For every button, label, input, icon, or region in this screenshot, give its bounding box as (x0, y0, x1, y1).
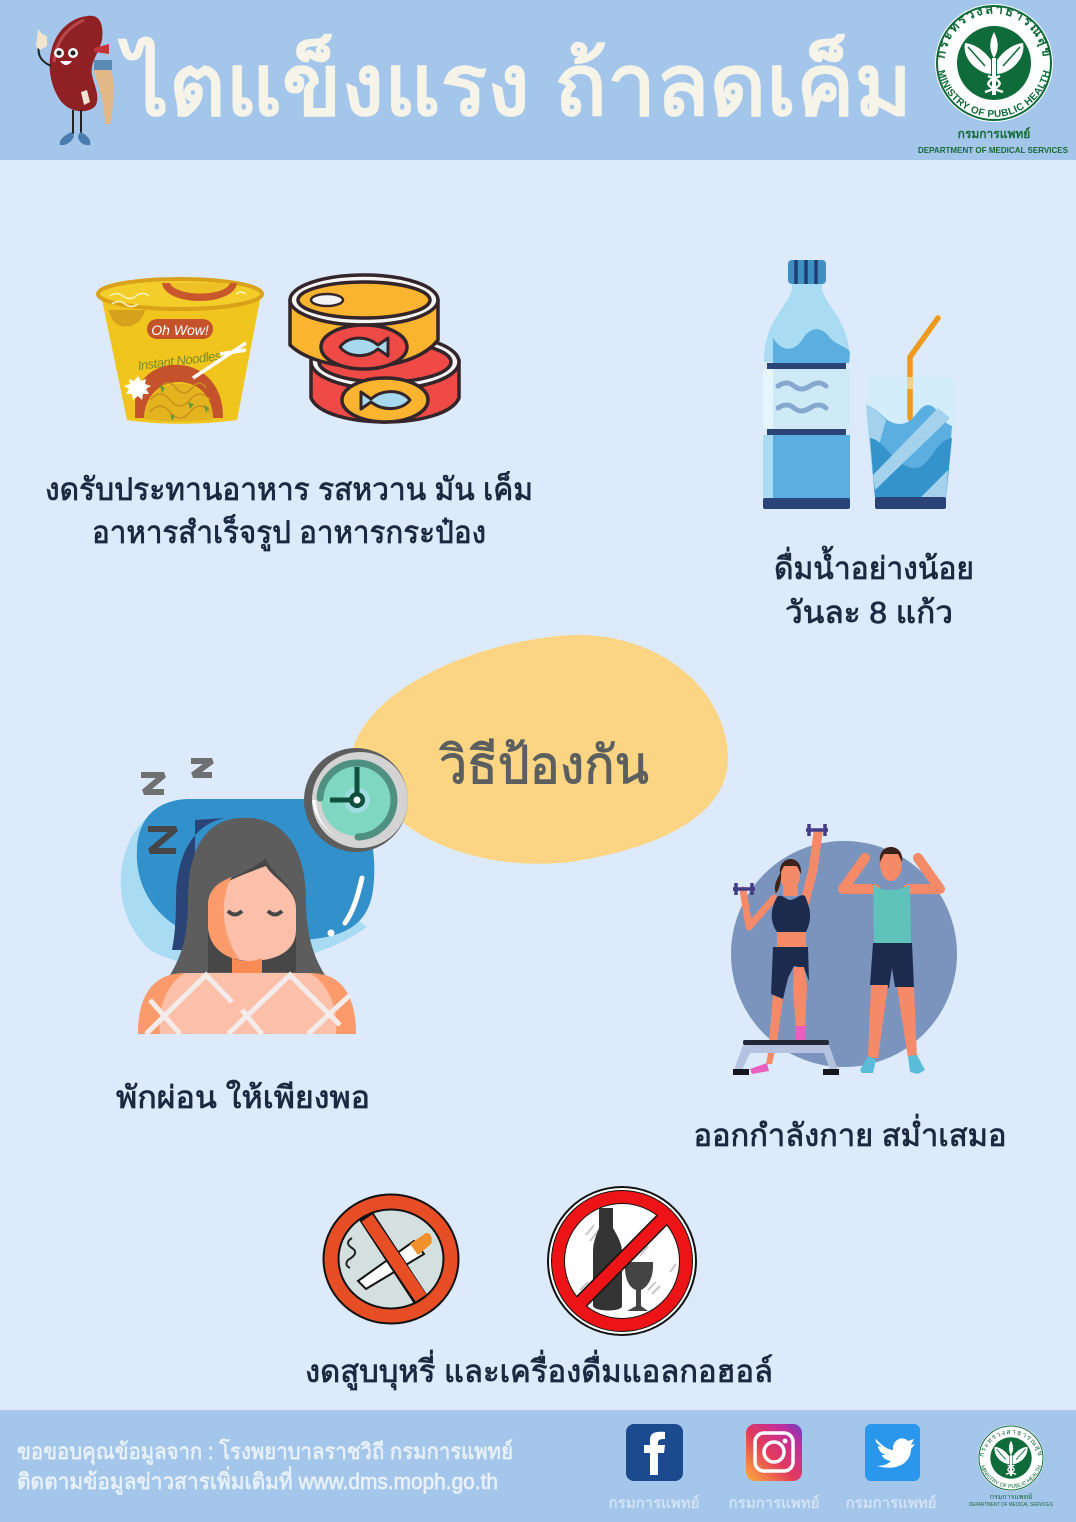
text: sleep enough: พักผ่อน ให้เพียงพอ (116, 1080, 370, 1115)
icon: instagram: กรมการแพทย์ (729, 1495, 819, 1512)
icon: instant noodle cup (98, 279, 262, 424)
footer band (0, 1410, 1076, 1522)
man figure (843, 847, 940, 1074)
icon: facebook (609, 1424, 699, 1512)
icon: kidney mascot (36, 16, 114, 145)
icon: twitter: กรมการแพทย์ (846, 1495, 936, 1512)
logo: footer department logo: กระทรวงสาธารณสุข (980, 1430, 1042, 1457)
text: exercise regularly: ออกกำลังกาย สม่ำเสมอ (694, 1114, 1006, 1153)
text: avoid sweet fat salty food (45, 471, 533, 551)
text: no smoking and alcohol: งดสูบบุหรี่ และเครื่องดื่มแอลกอฮอล์ (305, 1350, 773, 1391)
heading: prevention methods: วิธีป้องกัน (439, 737, 649, 795)
logo: department of medical services (918, 4, 1068, 155)
zzz letters (141, 761, 212, 792)
icon: sleeping woman (121, 761, 374, 1034)
icon: exercising couple (731, 824, 957, 1075)
text: drink water: ดื่มน้ำอย่างน้อย (774, 546, 974, 586)
text: avoid sweet fat salty food: อาหารสำเร็จรูป อาหารกระป๋อง (92, 514, 486, 551)
title: ไตแข็งแรง ถ้าลดเค็ม (119, 35, 912, 134)
text: avoid sweet fat salty food: งดรับประทานอาหาร รสหวาน มัน เค็ม (45, 471, 533, 507)
icon: instagram (729, 1424, 819, 1512)
text: drink water: วันละ 8 แก้ว (785, 595, 953, 630)
logo: department of medical services: MINISTRY OF PUBLIC HEALTH (938, 70, 1050, 117)
logo: footer department logo: กรมการแพทย์ (990, 1493, 1032, 1501)
icon: no alcohol (547, 1186, 697, 1336)
logo: department of medical services: กระทรวงสาธารณสุข (938, 7, 1050, 58)
logo: department of medical services: DEPARTMENT OF MEDICAL SERVICES (918, 145, 1068, 155)
header band (0, 0, 1076, 160)
footer credits: ติดตามข้อมูลข่าวสารเพิ่มเติมที่ www.dms.moph.go.th (17, 1466, 498, 1495)
footer credits (17, 1439, 513, 1495)
icon: instant noodle cup: Instant Noodles (137, 348, 223, 373)
woman figure (733, 824, 828, 1074)
logo: department of medical services: กรมการแพทย์ (958, 127, 1030, 141)
logo: footer department logo: MINISTRY OF PUBLIC HEALTH (980, 1465, 1042, 1488)
step platform (733, 1040, 839, 1075)
text: drink water (774, 546, 974, 630)
icon: instant noodle cup: Oh Wow! (151, 322, 209, 338)
footer credits: ขอขอบคุณข้อมูลจาก : โรงพยาบาลราชวิถี กรมการแพทย์ (17, 1439, 513, 1465)
icon: no smoking (324, 1195, 458, 1323)
icon: clock (304, 748, 408, 852)
central blob: prevention (352, 635, 728, 864)
icon: water bottle and glass (763, 260, 954, 509)
icon: facebook: กรมการแพทย์ (609, 1495, 699, 1512)
icon: twitter (846, 1424, 936, 1512)
logo: footer department logo: DEPARTMENT OF MEDICAL SERVICES (969, 1502, 1054, 1508)
logo: footer department logo (969, 1425, 1054, 1508)
icon: stacked tin cans (290, 275, 459, 422)
